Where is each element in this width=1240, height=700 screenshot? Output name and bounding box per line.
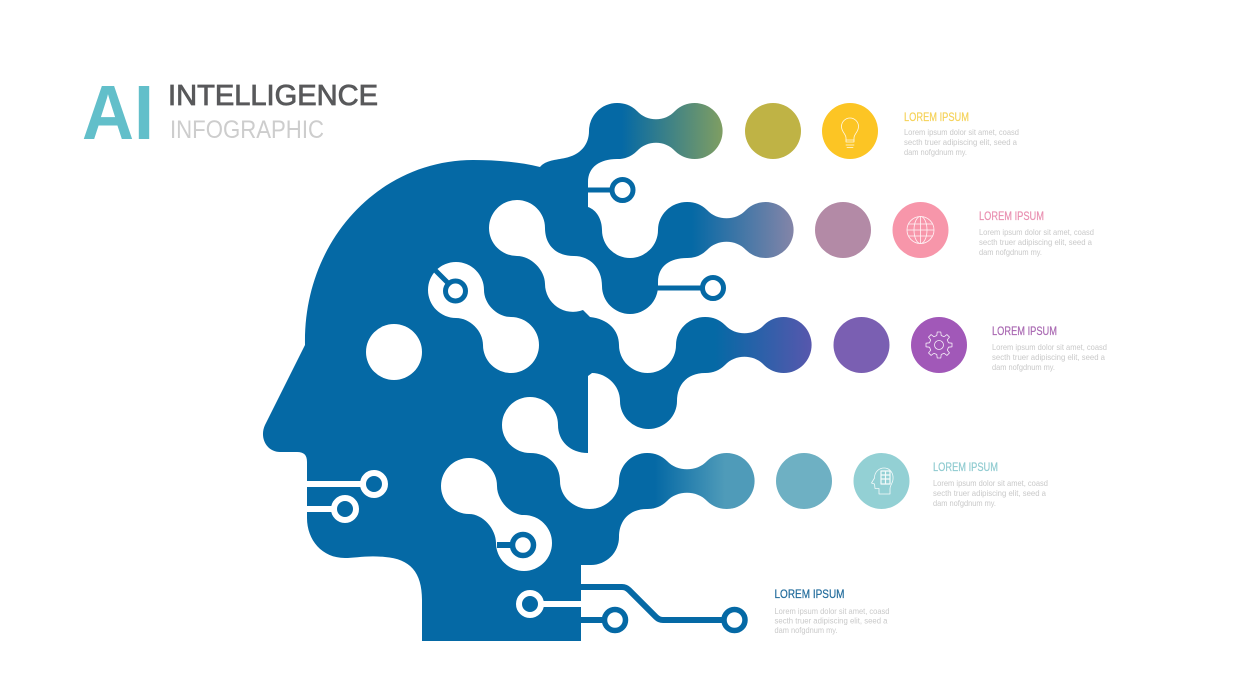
icon: head [854,453,910,509]
label 1 [904,112,1019,157]
branch 4 gradient [647,453,755,509]
icon: globe [892,202,948,258]
head shape [263,103,705,641]
row 4 [776,453,1048,509]
title [82,70,378,156]
label 4: dam nofgdnum my. [933,498,996,508]
label 4 [933,462,1048,508]
label 1: LOREM IPSUM [904,112,969,124]
node: lower blob [497,534,534,556]
row 2 [815,202,1094,258]
label 5: secth truer adipiscing elit, seed a [774,616,888,626]
label 2: Lorem ipsum dolor sit amet, coasd [979,227,1094,237]
node: neck white [519,593,582,615]
branch 2 gradient [687,202,794,258]
icon: light bulb [822,103,878,159]
label 4: LOREM IPSUM [933,462,998,474]
label 3: dam nofgdnum my. [992,362,1055,372]
white blob lower [441,458,552,571]
white dot in head [366,324,422,380]
label 2: dam nofgdnum my. [979,247,1042,257]
label 5: LOREM IPSUM [774,589,844,601]
row 1 [745,103,1019,159]
node: chin upper [307,473,385,495]
label 1: secth truer adipiscing elit, seed a [904,137,1017,147]
label 3 [992,326,1107,372]
label 5: Lorem ipsum dolor sit amet, coasd [774,606,890,616]
title: INTELLIGENCE: INTELLIGENCE [168,80,378,112]
branch 3 gradient [705,317,812,373]
label 5 [774,589,890,635]
label 2 [979,211,1094,257]
circle mauve [815,202,871,258]
label 3: Lorem ipsum dolor sit amet, coasd [992,342,1107,352]
node: neck long [581,587,745,630]
label 1: dam nofgdnum my. [904,147,967,157]
title: AI: AI [82,70,154,156]
icon: gear [911,317,967,373]
head silhouette with network [263,103,812,641]
circuit nodes [307,180,745,630]
circle violet [834,317,890,373]
node: upper blob [434,269,466,301]
label 2: secth truer adipiscing elit, seed a [979,237,1092,247]
node: neck short [581,610,626,630]
row 3 [834,317,1107,373]
circle olive [745,103,801,159]
subtitle: INFOGRAPHIC: INFOGRAPHIC [170,116,324,144]
node: chin lower [307,498,356,520]
label 1: Lorem ipsum dolor sit amet, coasd [904,127,1019,137]
white blob upper [428,262,539,373]
label 3: LOREM IPSUM [992,326,1057,338]
label 2: LOREM IPSUM [979,211,1044,223]
label 5: dam nofgdnum my. [774,625,838,635]
branch 1 gradient [617,103,723,159]
node: second branch [656,278,724,298]
label 4: Lorem ipsum dolor sit amet, coasd [933,478,1048,488]
label 3: secth truer adipiscing elit, seed a [992,352,1105,362]
circle teal [776,453,832,509]
node: top branch [586,180,633,200]
label 4: secth truer adipiscing elit, seed a [933,488,1046,498]
